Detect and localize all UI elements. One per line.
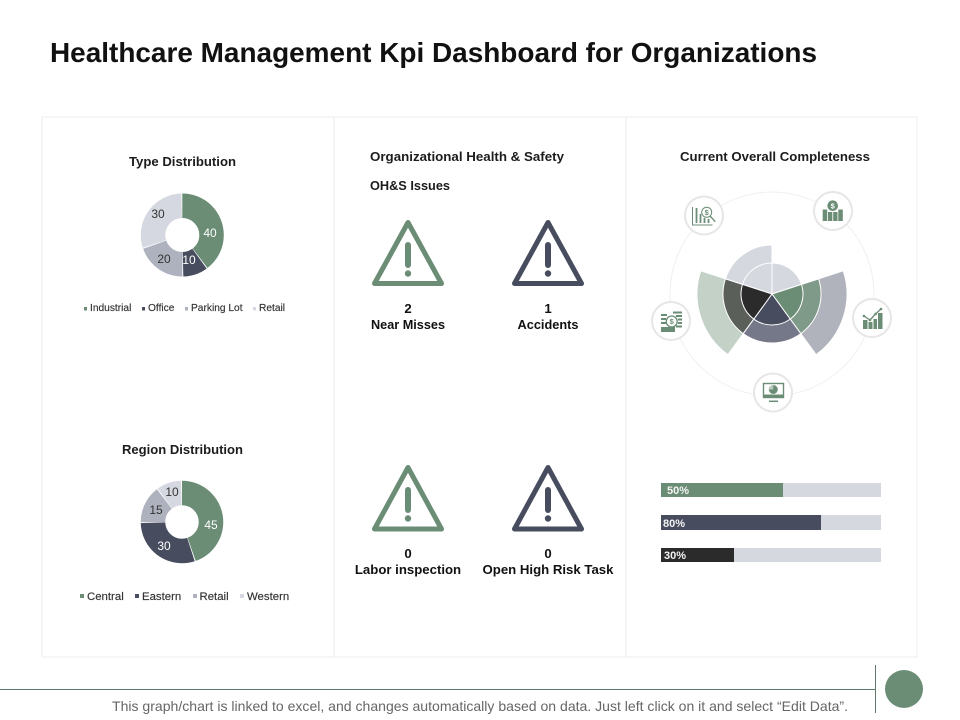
- legend: region distribution: Retail: [200, 591, 229, 603]
- donut values: region distribution: [149, 485, 218, 553]
- heading: organizational health and safety: Organizational Health & Safety: [370, 149, 565, 164]
- kpi: near misses: Near Misses: [371, 317, 445, 332]
- icon: dollar bar chart: $: [831, 201, 836, 210]
- icon: warning open high risk task: [514, 468, 582, 529]
- progress bar: 30%: [661, 548, 881, 562]
- icon: dollar bar chart: [814, 192, 852, 230]
- heading: region distribution: Region Distribution: [122, 442, 243, 457]
- donut values: region distribution: 10: [165, 485, 179, 499]
- dashboard frame: [42, 117, 917, 657]
- legend: type distribution: Retail: [259, 303, 285, 314]
- kpi: labor inspection: [355, 546, 461, 577]
- donut values: region distribution: 15: [149, 503, 163, 517]
- icon: growth chart: [853, 299, 891, 337]
- kpi: near misses: 2: [404, 301, 412, 316]
- progress bar: 80%: 80%: [663, 518, 685, 530]
- kpi: accidents: [518, 301, 578, 332]
- heading: current overall completeness: Current Overall Completeness: [680, 149, 870, 164]
- panel: region distribution: [80, 442, 289, 603]
- legend: type distribution: [84, 303, 285, 314]
- title: Healthcare Management Kpi Dashboard for Organizations: [50, 37, 817, 68]
- footer circle: [885, 670, 923, 708]
- legend: type distribution: Industrial: [90, 303, 131, 314]
- polar area chart: [697, 245, 847, 355]
- progress bar: 80%: [661, 515, 881, 530]
- donut values: region distribution: 30: [157, 539, 171, 553]
- donut chart: region distribution: [153, 493, 211, 551]
- footer note: This graph/chart is linked to excel, and changes automatically based on data. Just left click on it and select “Edit Data”.: [112, 698, 848, 714]
- donut chart: type distribution: [153, 206, 212, 264]
- legend: region distribution: [80, 591, 289, 603]
- outer ring: [670, 192, 874, 396]
- progress bar: 50%: 50%: [667, 485, 689, 497]
- footer: [0, 665, 923, 714]
- icon: warning labor inspection: [374, 468, 442, 529]
- kpi: near misses: [371, 301, 445, 332]
- legend: region distribution: Eastern: [142, 591, 181, 603]
- heading: type distribution: Type Distribution: [129, 154, 236, 169]
- legend: region distribution: Central: [87, 591, 124, 603]
- kpi: open high risk task: 0: [544, 546, 552, 561]
- kpi: open high risk task: Open High Risk Task: [483, 562, 614, 577]
- donut values: type distribution: [151, 207, 217, 267]
- kpi: accidents: 1: [544, 301, 552, 316]
- donut values: type distribution: 20: [157, 252, 171, 266]
- legend: type distribution: Parking Lot: [191, 303, 243, 314]
- panel: organizational health and safety: [355, 149, 614, 577]
- icon: monitor with pie chart: [754, 374, 792, 412]
- icon: warning accidents: [514, 222, 582, 284]
- icon: warning near misses: [374, 222, 442, 284]
- legend: type distribution: Office: [148, 303, 175, 314]
- donut values: type distribution: 40: [203, 226, 217, 240]
- kpi: accidents: Accidents: [518, 317, 578, 332]
- progress bar: 50%: [661, 483, 881, 497]
- subheading: OH&S issues: OH&S Issues: [370, 178, 450, 193]
- panel: current overall completeness: [652, 149, 891, 562]
- progress bar: 30%: 30%: [664, 550, 686, 562]
- donut values: region distribution: 45: [204, 518, 218, 532]
- kpi: open high risk task: [483, 546, 614, 577]
- icon: analysis chart with magnifier: [685, 196, 723, 234]
- icon: coins: [652, 302, 690, 340]
- kpi: labor inspection: Labor inspection: [355, 562, 461, 577]
- panel: type distribution: [84, 154, 285, 314]
- icon: coins: $: [670, 317, 675, 326]
- donut values: type distribution: 30: [151, 207, 165, 221]
- legend: region distribution: Western: [247, 591, 289, 603]
- kpi: labor inspection: 0: [404, 546, 412, 561]
- donut values: type distribution: 10: [182, 253, 196, 267]
- icon: analysis chart with magnifier: $: [705, 208, 710, 217]
